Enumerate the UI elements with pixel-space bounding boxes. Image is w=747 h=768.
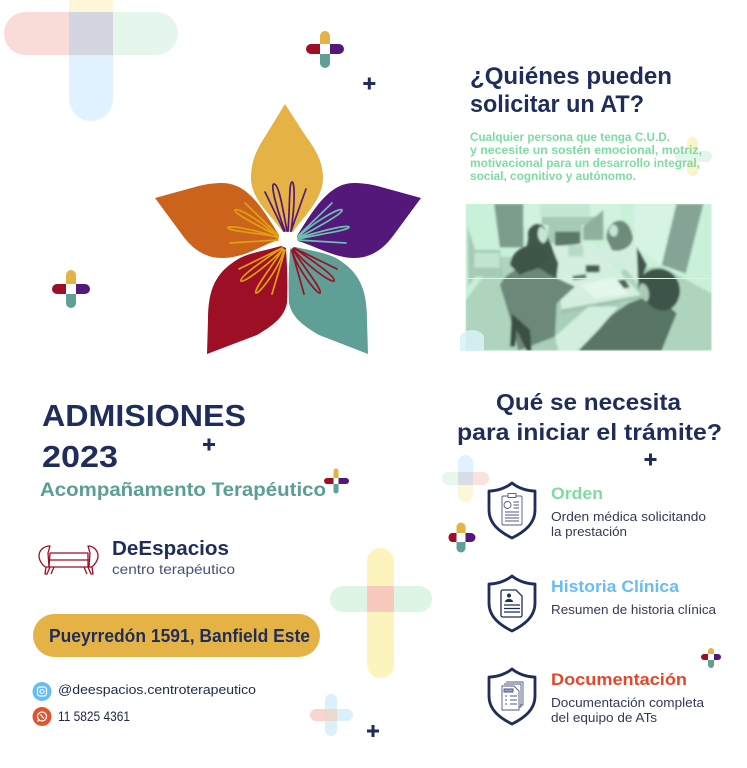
heading: who can apply: solicitar un AT? — [470, 91, 644, 118]
icon: whatsapp — [32, 707, 52, 726]
icon: shield with documents — [489, 669, 535, 724]
floor — [466, 257, 522, 351]
person left front — [500, 267, 575, 351]
heading: requirements: Qué se necesita — [496, 389, 681, 415]
person right — [603, 240, 640, 284]
petal: yellow — [251, 104, 323, 232]
back wall and doors — [494, 204, 523, 247]
text: orden — [551, 484, 706, 539]
brand name: centro terapéutico — [112, 561, 235, 577]
petal lines: red petal — [239, 248, 285, 294]
navy plus marks — [203, 78, 656, 737]
text: historia clinica — [551, 577, 716, 617]
petal: teal — [289, 247, 368, 354]
address pill — [33, 614, 320, 657]
decorative cross large centre — [330, 548, 432, 678]
decorative cross bottom — [310, 694, 353, 736]
brand name: DeEspacios — [112, 538, 229, 560]
text block: who can apply: motivacional para un desarrollo integral, — [470, 158, 700, 170]
flower logo — [155, 104, 421, 354]
text: documentacion: del equipo de ATs — [551, 711, 657, 725]
title: admisiones: ADMISIONES — [42, 398, 246, 433]
petal: orange — [155, 183, 279, 258]
icon: instagram — [32, 682, 52, 701]
icon: sofa — [39, 546, 98, 574]
text block: who can apply: social, cognitivo y autónomo. — [470, 171, 636, 183]
table objects — [586, 265, 600, 272]
table — [553, 243, 641, 309]
decorative cross behind text — [675, 137, 712, 176]
heading: who can apply: ¿Quiénes pueden — [470, 63, 672, 90]
text: documentacion: Documentación — [551, 670, 687, 689]
text: documentacion: Documentación completa — [551, 696, 704, 710]
small colored cross near subtitle — [324, 469, 349, 494]
heading: requirements — [457, 389, 722, 445]
title: admisiones: 2023 — [42, 439, 118, 474]
text block: who can apply: Cualquier persona que tenga C.U.D. — [470, 132, 670, 144]
address pill: Pueyrredón 1591, Banfield Este — [49, 626, 310, 646]
small colored cross right — [449, 522, 476, 552]
phone number: 11 5825 4361 — [58, 708, 130, 724]
subtitle: Acompañamento Terapéutico — [40, 480, 326, 501]
small colored cross left — [52, 270, 90, 308]
icon: shield with document — [489, 576, 535, 631]
petal: red — [207, 246, 287, 354]
petal lines: purple petal — [298, 203, 349, 243]
text: historia clinica: Resumen de historia clínica — [551, 603, 716, 617]
icon: shield with clipboard — [489, 483, 535, 538]
chair left — [468, 227, 503, 287]
text: historia clinica: Historia Clínica — [551, 577, 680, 596]
person left back — [526, 222, 560, 278]
petal: purple — [297, 183, 421, 258]
text: orden: Orden médica solicitando — [551, 510, 706, 524]
person bottom right — [577, 293, 677, 351]
brand name — [112, 538, 235, 577]
petal lines: yellow petal — [265, 182, 306, 231]
small colored cross bottom right — [701, 648, 721, 668]
text block: who can apply — [470, 132, 702, 183]
text: orden: Orden — [551, 484, 603, 503]
heading: requirements: para iniciar el trámite? — [457, 419, 722, 445]
decorative cross right — [442, 455, 489, 502]
text block: who can apply: y necesite un sostén emocional, motriz, — [470, 145, 702, 157]
small colored cross top — [306, 31, 344, 68]
photo: team meeting around a table — [466, 204, 712, 351]
petal lines: teal petal — [292, 248, 337, 294]
decorative large cross top left — [4, 0, 178, 121]
text: orden: la prestación — [551, 525, 627, 539]
instagram handle: @deespacios.centroterapeutico — [58, 682, 256, 697]
photo overlay stripe and faint cross end — [460, 278, 712, 351]
petal lines: orange petal — [228, 203, 278, 243]
text: documentacion — [551, 670, 704, 725]
